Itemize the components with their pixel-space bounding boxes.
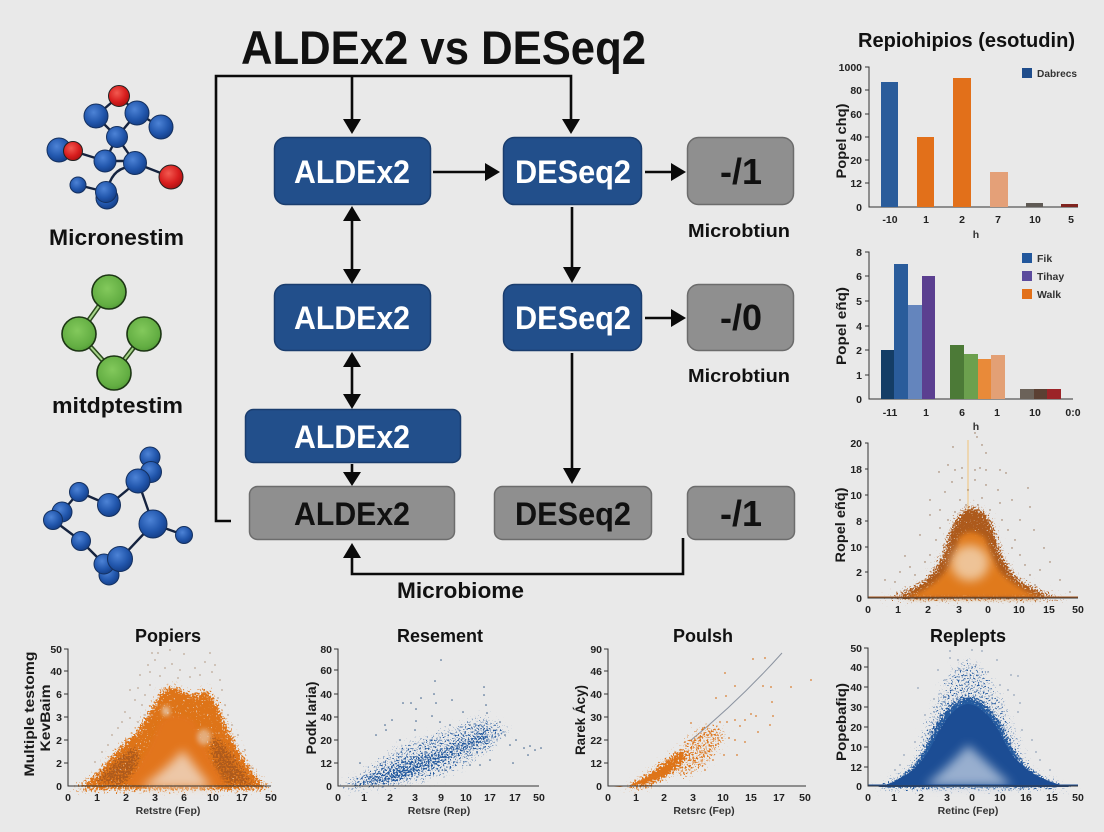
x axis ticks chart D: 10: [994, 792, 1006, 804]
y axis ticks chart A: 40: [50, 666, 62, 678]
y axis ticks chart 2: 4: [856, 321, 862, 333]
arrow: ALDEx2 to DESeq2: [433, 163, 500, 181]
x axis ticks chart C: 2: [661, 792, 667, 804]
x axis ticks chart C: 1: [633, 792, 639, 804]
y axis ticks chart 2: 8: [856, 247, 862, 259]
arrow: ALDEx2 row 1 and row 2 double: [343, 206, 361, 284]
y axis ticks chart D: 50: [850, 643, 862, 655]
x axis ticks chart A: 6: [181, 792, 187, 804]
x axis ticks chart B: 3: [412, 792, 418, 804]
box: ALDEx2 row 3: ALDEx2: [294, 419, 410, 455]
icon: blue molecule: [44, 447, 192, 585]
x axis ticks chart 3: 0: [985, 604, 991, 616]
scatter chart A: Popiers: [21, 626, 277, 817]
y axis ticks chart 3: 10: [850, 490, 862, 502]
title chart B: Resement: [397, 626, 483, 646]
y label chart C: Rarek Ácy): [572, 685, 588, 755]
x axis ticks chart C: 50: [799, 792, 811, 804]
y axis ticks chart 2: 1: [856, 370, 862, 382]
y axis ticks chart C: 90: [590, 644, 602, 656]
y axis ticks chart C: 22: [590, 735, 602, 747]
y axis ticks chart D: 12: [850, 762, 862, 774]
x axis ticks chart C: 17: [773, 792, 785, 804]
y axis ticks chart D: 40: [850, 662, 862, 674]
y axis ticks chart A: 6: [56, 689, 62, 701]
x axis ticks chart B: 0: [335, 792, 341, 804]
y axis ticks chart 3: 20: [850, 438, 862, 450]
x axis ticks chart A: 3: [152, 792, 158, 804]
y axis ticks chart 3: 18: [850, 464, 862, 476]
box: ALDEx2 row 4 gray: [250, 486, 454, 540]
y axis ticks chart C: 30: [590, 712, 602, 724]
y label chart A: [21, 652, 53, 776]
y axis ticks chart 3: 10: [850, 542, 862, 554]
icon: green molecule: [62, 275, 161, 390]
x axis ticks chart 1: 2: [959, 214, 965, 226]
y axis ticks chart B: 60: [320, 665, 332, 677]
title chart A: Popiers: [135, 626, 201, 646]
x label chart A: Retstre (Fep): [136, 805, 200, 817]
x axis ticks chart 1: [882, 214, 1074, 226]
legend chart 1: Dabrecs: [1037, 68, 1077, 80]
x axis ticks chart A: 2: [123, 792, 129, 804]
y axis ticks chart 1: 12: [850, 178, 862, 190]
x axis ticks chart 3: 3: [956, 604, 962, 616]
x axis ticks chart D: 16: [1020, 792, 1032, 804]
y axis ticks chart D: 40: [850, 682, 862, 694]
x axis ticks chart 2: 1: [923, 407, 929, 419]
y axis ticks chart C: 46: [590, 666, 602, 678]
y axis ticks chart A: [50, 644, 62, 793]
y axis ticks chart A: 0: [56, 781, 62, 793]
y axis ticks chart 2: 2: [856, 345, 862, 357]
x label chart B: Retsre (Rep): [408, 805, 470, 817]
title chart D: Replepts: [930, 626, 1006, 646]
speckled points chart A: [66, 686, 273, 790]
legend chart 2: [1022, 253, 1064, 301]
arrow: feedback bracket from bottom row to top row: [216, 76, 580, 521]
y label chart 1: Popel chq): [833, 104, 849, 178]
box: ALDEx2 row 2: [274, 284, 430, 350]
label: Microbtiun 2: Microbtiun: [688, 366, 790, 386]
x axis ticks chart D: 2: [918, 792, 924, 804]
x axis ticks chart A: 1: [94, 792, 100, 804]
legend chart 2: Fik: [1037, 253, 1052, 265]
outlier points chart B: [360, 660, 541, 770]
y axis ticks chart B: 20: [320, 735, 332, 747]
box: ALDEx2 row 1: ALDEx2: [294, 154, 410, 190]
legend chart 2: Tihay: [1037, 271, 1064, 283]
scatter chart C: Poulsh: [572, 626, 811, 817]
x axis ticks chart B: 2: [387, 792, 393, 804]
x axis ticks chart C: 0: [605, 792, 611, 804]
label: molecule 2: mitdptestim: [52, 393, 183, 418]
y axis ticks chart D: 20: [850, 722, 862, 734]
arrow: result back to ALDEx2 row 4: [343, 538, 683, 574]
scatter chart B: Resement: [303, 626, 545, 817]
x axis ticks chart D: 0: [865, 792, 871, 804]
x axis ticks chart 1: -10: [882, 214, 898, 226]
x axis ticks chart B: [335, 792, 545, 804]
arrow: DESeq2 to result row 1: [645, 163, 686, 181]
y axis ticks chart 3: 8: [856, 516, 862, 528]
x axis ticks chart 2: [883, 407, 1081, 419]
outlier points chart A: [95, 650, 252, 768]
bars chart 1: [881, 78, 1078, 207]
y axis ticks chart 1: 40: [850, 132, 862, 144]
y axis ticks chart B: 40: [320, 689, 332, 701]
x axis ticks chart B: 17: [484, 792, 496, 804]
box: ALDEx2 row 3: [246, 410, 460, 462]
arrow: DESeq2 to result row 2: [645, 309, 686, 327]
box: DESeq2 row 2: DESeq2: [515, 300, 631, 336]
box: ALDEx2 row 2: ALDEx2: [294, 300, 410, 336]
y axis ticks chart D: [850, 643, 862, 793]
x axis ticks chart A: 17: [236, 792, 248, 804]
y axis ticks chart 3: 0: [856, 593, 862, 605]
speckled points chart 3: [868, 440, 1078, 599]
arrow: ALDEx2 row 2 and row 3 double: [343, 352, 361, 409]
box: result -/0 row 2: [688, 284, 794, 350]
outlier points chart D: [895, 650, 1050, 770]
y axis ticks chart 1: 1000: [839, 62, 862, 74]
x axis ticks chart C: [605, 792, 811, 804]
label: Microbtiun 1: Microbtiun: [688, 221, 790, 241]
x axis ticks chart 2: 0:0: [1065, 407, 1081, 419]
speckled points chart C: [608, 722, 728, 788]
x axis ticks chart 1: 1: [923, 214, 929, 226]
x axis ticks chart D: 15: [1046, 792, 1058, 804]
x axis ticks chart C: 15: [745, 792, 757, 804]
title chart C: Poulsh: [673, 626, 733, 646]
box: DESeq2 row 4 gray: [494, 486, 652, 540]
box: ALDEx2 row 1: [274, 138, 430, 204]
y label chart A: KevBaim: [37, 684, 53, 752]
icon: blue and red molecule: [47, 86, 183, 209]
x axis ticks chart D: 1: [891, 792, 897, 804]
speckled points chart B: [338, 715, 510, 789]
x axis ticks chart 3: 0: [865, 604, 871, 616]
y axis ticks chart D: 10: [850, 742, 862, 754]
y axis ticks chart 1: 60: [850, 109, 862, 121]
x label chart 2: h: [973, 421, 979, 433]
scatter chart 3: orange bell right: [832, 433, 1084, 616]
y label chart A: Multiple testomg: [21, 652, 37, 776]
y axis ticks chart 2: [856, 247, 862, 406]
x axis ticks chart 2: -11: [883, 407, 897, 419]
x label chart D: Retinc (Fep): [938, 805, 998, 817]
bars chart 2: [881, 264, 1061, 399]
box: DESeq2 row 1: DESeq2: [515, 154, 631, 190]
y label chart 2: Popel eñq): [833, 287, 849, 365]
y label chart 3: Ropel eñq): [832, 488, 848, 562]
y axis ticks chart D: 30: [850, 702, 862, 714]
x axis ticks chart B: 50: [533, 792, 545, 804]
y axis ticks chart 2: 0: [856, 394, 862, 406]
box: ALDEx2 row 4 gray: ALDEx2: [294, 496, 410, 532]
x label chart 1: h: [973, 229, 979, 241]
y axis ticks chart D: 0: [856, 781, 862, 793]
box: result -/1 row 4: -/1: [720, 493, 762, 534]
x axis ticks chart B: 9: [438, 792, 444, 804]
label: Microbiome: Microbiome: [397, 578, 524, 603]
legend chart 2: Walk: [1037, 289, 1061, 301]
y axis ticks chart 1: 0: [856, 202, 862, 214]
y label chart D: Popebafiq): [833, 683, 849, 761]
box: result -/1 row 1: -/1: [720, 151, 762, 192]
box: DESeq2 row 4 gray: DESeq2: [515, 496, 631, 532]
arrow: DESeq2 row 1 to row 2: [563, 207, 581, 283]
y axis ticks chart B: [320, 644, 332, 793]
x axis ticks chart 3: [865, 604, 1084, 616]
arrow: DESeq2 row 2 to row 4: [563, 353, 581, 484]
x axis ticks chart D: 3: [944, 792, 950, 804]
x axis ticks chart 3: 15: [1043, 604, 1055, 616]
x axis ticks chart A: [65, 792, 277, 804]
box: result -/0 row 2: -/0: [720, 297, 762, 338]
x axis ticks chart 1: 7: [995, 214, 1001, 226]
bar chart 2: [833, 247, 1081, 433]
x axis ticks chart C: 3: [690, 792, 696, 804]
bar chart 1: [833, 62, 1078, 241]
x axis ticks chart D: 0: [969, 792, 975, 804]
label: molecule 1: Micronestim: [49, 225, 184, 250]
x axis ticks chart 3: 2: [925, 604, 931, 616]
x axis ticks chart 2: 6: [959, 407, 965, 419]
x axis ticks chart 2: 1: [994, 407, 1000, 419]
y axis ticks chart A: 50: [50, 644, 62, 656]
y axis ticks chart 2: 6: [856, 271, 862, 283]
x axis ticks chart 1: 10: [1029, 214, 1041, 226]
x axis ticks chart D: [865, 792, 1084, 804]
outlier points chart 3: [885, 433, 1070, 592]
x axis ticks chart B: 1: [361, 792, 367, 804]
y axis ticks chart A: 3: [56, 712, 62, 724]
y axis ticks chart C: 0: [596, 781, 602, 793]
y axis ticks chart 1: 80: [850, 85, 862, 97]
x axis ticks chart A: 10: [207, 792, 219, 804]
trend line chart C: [690, 653, 782, 741]
box: result -/1 row 1: [688, 138, 794, 204]
y axis ticks chart A: 2: [56, 758, 62, 770]
x axis ticks chart A: 50: [265, 792, 277, 804]
x axis ticks chart 1: 5: [1068, 214, 1074, 226]
y axis ticks chart 3: [850, 438, 862, 605]
x axis ticks chart A: 0: [65, 792, 71, 804]
y axis ticks chart C: 12: [590, 758, 602, 770]
x label chart C: Retsrc (Fep): [673, 805, 735, 817]
y axis ticks chart B: 80: [320, 644, 332, 656]
x axis ticks chart B: 17: [509, 792, 521, 804]
y axis ticks chart B: 40: [320, 712, 332, 724]
title: ALDEx2 vs DESeq2: [241, 21, 646, 74]
y axis ticks chart 3: 2: [856, 567, 862, 579]
x axis ticks chart D: 50: [1072, 792, 1084, 804]
y axis ticks chart 1: 20: [850, 155, 862, 167]
y axis ticks chart B: 0: [326, 781, 332, 793]
y axis ticks chart B: 12: [320, 758, 332, 770]
speckled points chart D: [868, 660, 1078, 788]
x axis ticks chart 3: 1: [895, 604, 901, 616]
y axis ticks chart 2: 5: [856, 296, 862, 308]
heading: right charts: Repiohipios (esotudin): [858, 30, 1075, 52]
x axis ticks chart 2: 10: [1029, 407, 1041, 419]
x axis ticks chart C: 10: [717, 792, 729, 804]
box: result -/1 row 4: [688, 486, 794, 540]
y axis ticks chart C: [590, 644, 602, 793]
y axis ticks chart C: 40: [590, 689, 602, 701]
x axis ticks chart 3: 10: [1013, 604, 1025, 616]
y axis ticks chart 1: [839, 62, 862, 214]
x axis ticks chart B: 10: [460, 792, 472, 804]
x axis ticks chart 3: 50: [1072, 604, 1084, 616]
y label chart B: Podk laria): [303, 682, 319, 754]
scatter chart D: Replepts: [833, 626, 1084, 817]
box: DESeq2 row 2: [504, 284, 642, 350]
outlier points chart C: [678, 658, 811, 770]
y axis ticks chart A: 2: [56, 735, 62, 747]
arrow: ALDEx2 row 3 to row 4: [343, 464, 361, 486]
box: DESeq2 row 1: [504, 138, 642, 204]
